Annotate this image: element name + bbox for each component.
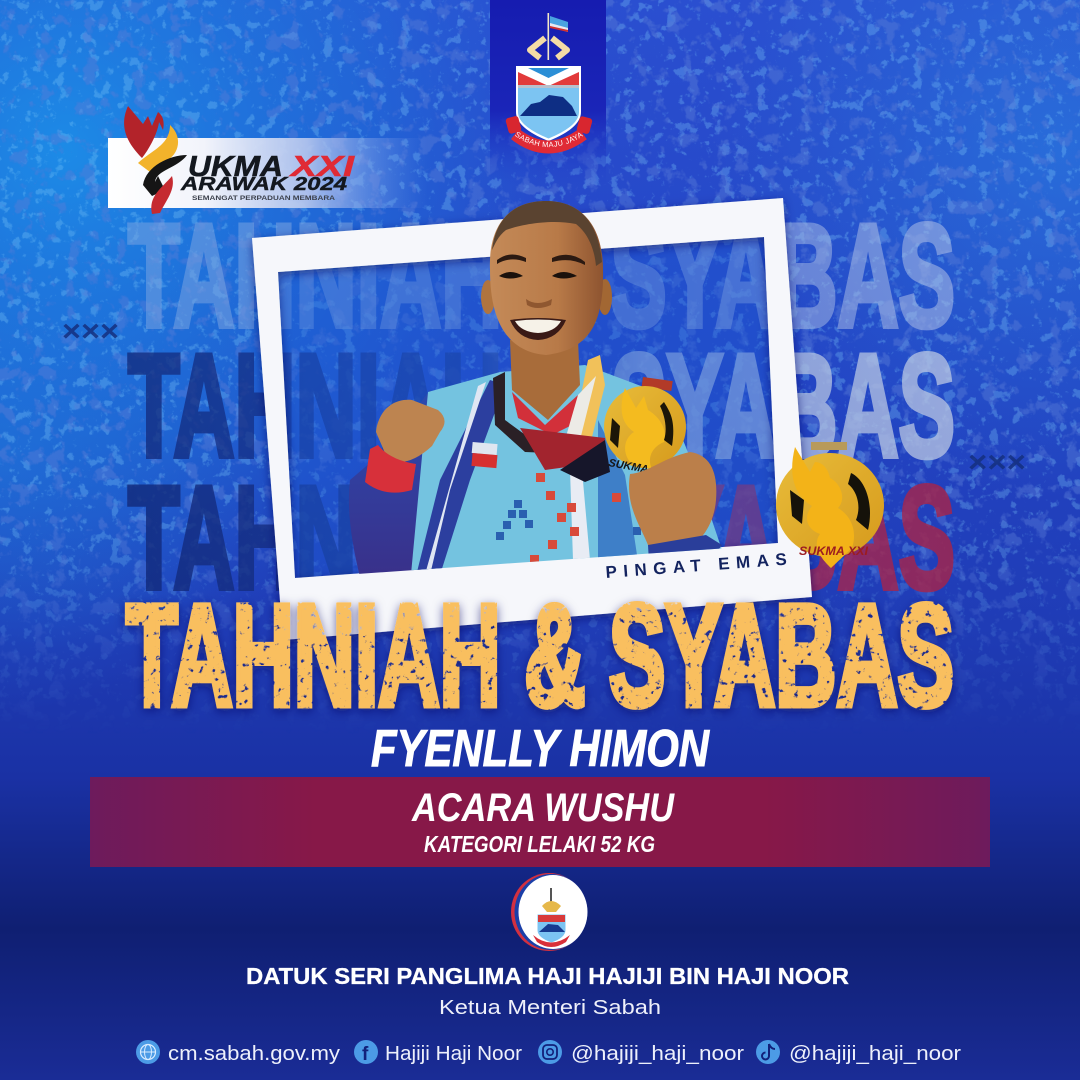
head <box>481 201 612 355</box>
jacket pattern squares <box>530 473 621 564</box>
right hand <box>629 452 716 550</box>
red collar <box>512 392 578 435</box>
icon: gold medal <box>776 442 884 568</box>
ghost repeated text: tahniah & syabas <box>128 194 955 619</box>
website: cm.sabah.gov.my <box>168 1043 340 1065</box>
photo frame <box>252 198 812 640</box>
smile <box>510 318 566 340</box>
sukma wordmark <box>180 151 355 202</box>
jacket torso <box>410 365 722 585</box>
tiktok handle: @hajiji_haji_noor <box>789 1043 961 1065</box>
icon: tiktok <box>756 1040 780 1064</box>
chief minister title: Ketua Menteri Sabah <box>439 997 661 1019</box>
event name: ACARA WUSHU <box>411 786 675 830</box>
sukma wordmark: SEMANGAT PERPADUAN MEMBARA <box>192 195 335 202</box>
flag patch <box>471 442 498 468</box>
instagram handle: @hajiji_haji_noor <box>571 1043 744 1065</box>
icon: shield <box>516 66 581 141</box>
neck <box>510 340 580 420</box>
athlete portrait <box>349 201 722 585</box>
icon: crest arms <box>530 38 567 58</box>
category: KATEGORI LELAKI 52 KG <box>424 831 655 857</box>
crest panel: state of sabah <box>490 0 606 174</box>
panel: event band <box>90 777 990 867</box>
sukma logo <box>108 106 428 214</box>
icon: facebook: f <box>362 1044 369 1065</box>
sukma wordmark: UKMA <box>188 151 283 183</box>
icon: motto ribbon <box>506 116 592 154</box>
ribbon <box>493 372 534 452</box>
nose <box>526 299 552 308</box>
red cuff <box>365 445 416 493</box>
sukma wordmark: XXI <box>288 151 355 183</box>
left fist <box>376 400 445 462</box>
icon: torch flame <box>124 106 187 214</box>
facebook name: Hajiji Haji Noor <box>385 1043 522 1065</box>
icon: hala tuju logo <box>511 873 588 951</box>
logo white band <box>108 138 428 208</box>
left sleeve <box>349 390 442 574</box>
decorative crosses right: ××× <box>968 446 1026 479</box>
chief minister name: DATUK SERI PANGLIMA HAJI HAJIJI BIN HAJI NOOR <box>246 963 849 989</box>
icon: instagram <box>538 1040 562 1064</box>
caption: pingat emas: PINGAT EMAS <box>605 549 791 582</box>
icon: flag on pole <box>548 13 568 60</box>
icon: facebook <box>354 1040 378 1065</box>
athlete name: FYENLLY HIMON <box>371 720 710 778</box>
icon: motto ribbon: SABAH MAJU JAYA <box>515 132 584 148</box>
sukma wordmark: ARAWAK 2024 <box>180 174 347 194</box>
decorative crosses left: ××× <box>62 315 119 348</box>
hair <box>492 201 602 266</box>
jacket blue panels <box>418 380 494 570</box>
icon: globe <box>136 1040 160 1064</box>
eyebrows <box>497 254 585 265</box>
medal wordmark: SUKMA XXI <box>799 544 869 558</box>
social links <box>136 1040 961 1065</box>
eyes <box>499 272 577 278</box>
icon: medal held by athlete <box>604 377 686 476</box>
icon: medal held by athlete: SUKMA <box>607 457 649 476</box>
